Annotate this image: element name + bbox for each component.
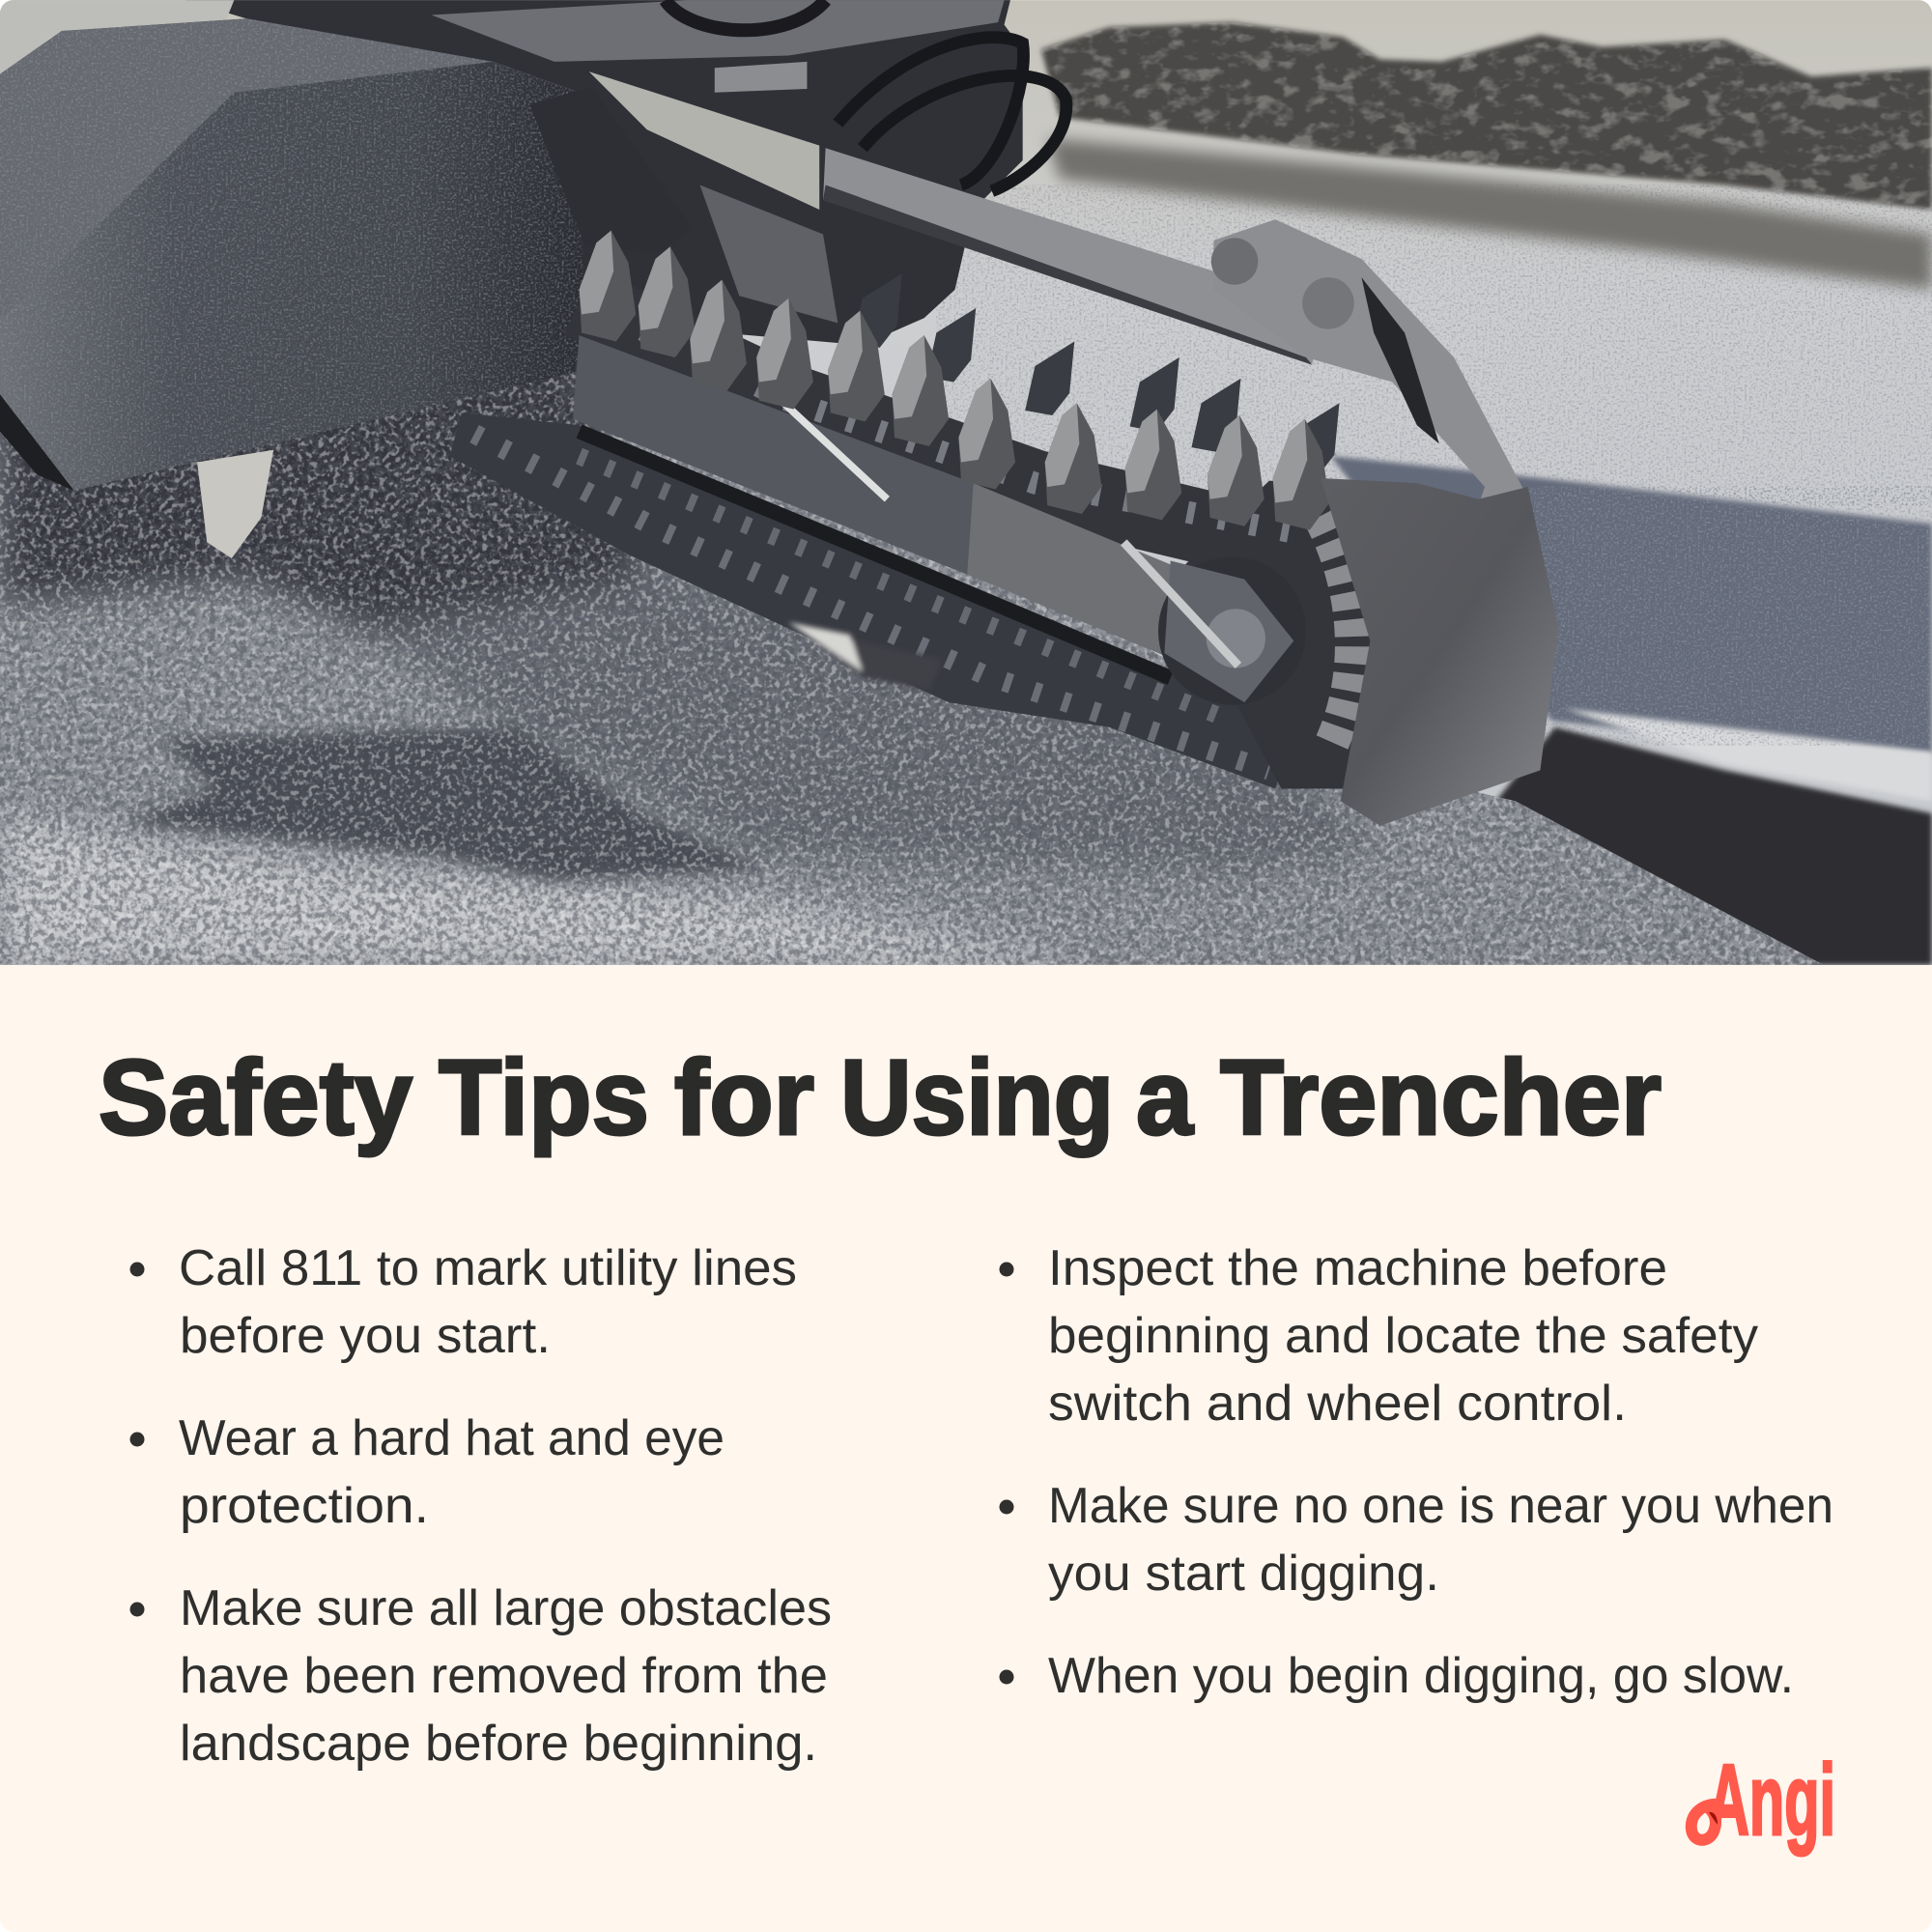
left column of safety tips [129,1240,832,1772]
boom arm [589,71,1525,580]
tip: inspect machine: switch and wheel control. [1048,1376,1627,1432]
fender hood [0,18,583,558]
teeth row behind [853,273,1339,477]
title: a [1136,1038,1194,1157]
lower chain [450,412,1293,788]
right column of safety tips [999,1240,1833,1704]
title: Using [840,1038,1114,1157]
tip: hard hat: protection. [180,1478,429,1534]
guard shoe [1321,478,1559,826]
title [99,1038,1662,1158]
tip: no one near [999,1478,1833,1602]
teeth row in front [579,231,1329,530]
title: Trencher [1220,1038,1662,1157]
tip: inspect machine [999,1240,1758,1432]
shadow on ground right [1331,456,1932,754]
speckle on shadow [1528,487,1932,746]
top machinery and hoses [0,0,1066,345]
tip: call 811: Call 811 to mark utility lines [179,1240,797,1296]
sunlit strip [1565,709,1932,801]
photo: trencher digging into gravel [0,0,1932,965]
title: for [674,1038,814,1157]
tip: no one near: you start digging. [1048,1546,1439,1602]
tip: hard hat [129,1410,724,1534]
dark shadow lower right [1466,727,1932,965]
upper chain and cutter bar [573,302,1374,788]
tip: call 811: before you start. [180,1308,551,1364]
tip: go slow: When you begin digging, go slow. [1048,1648,1794,1704]
tip: hard hat: Wear a hard hat and eye [179,1410,724,1466]
tip: call 811 [129,1240,797,1364]
tip: obstacles: Make sure all large obstacles [180,1580,832,1636]
gravel field [0,372,1823,965]
tip: obstacles: have been removed from the [180,1648,828,1704]
tip: obstacles [129,1580,832,1772]
tip: inspect machine: beginning and locate the safety [1048,1308,1758,1364]
title: Tips [439,1038,649,1157]
tip: no one near: Make sure no one is near you when [1048,1478,1833,1534]
dirt mounds in background [1023,13,1932,290]
tip: inspect machine: Inspect the machine before [1048,1240,1667,1296]
debris [788,622,943,690]
ground and sky [0,0,1932,965]
tip: obstacles: landscape before beginning. [180,1716,817,1772]
title: Safety [99,1038,412,1157]
